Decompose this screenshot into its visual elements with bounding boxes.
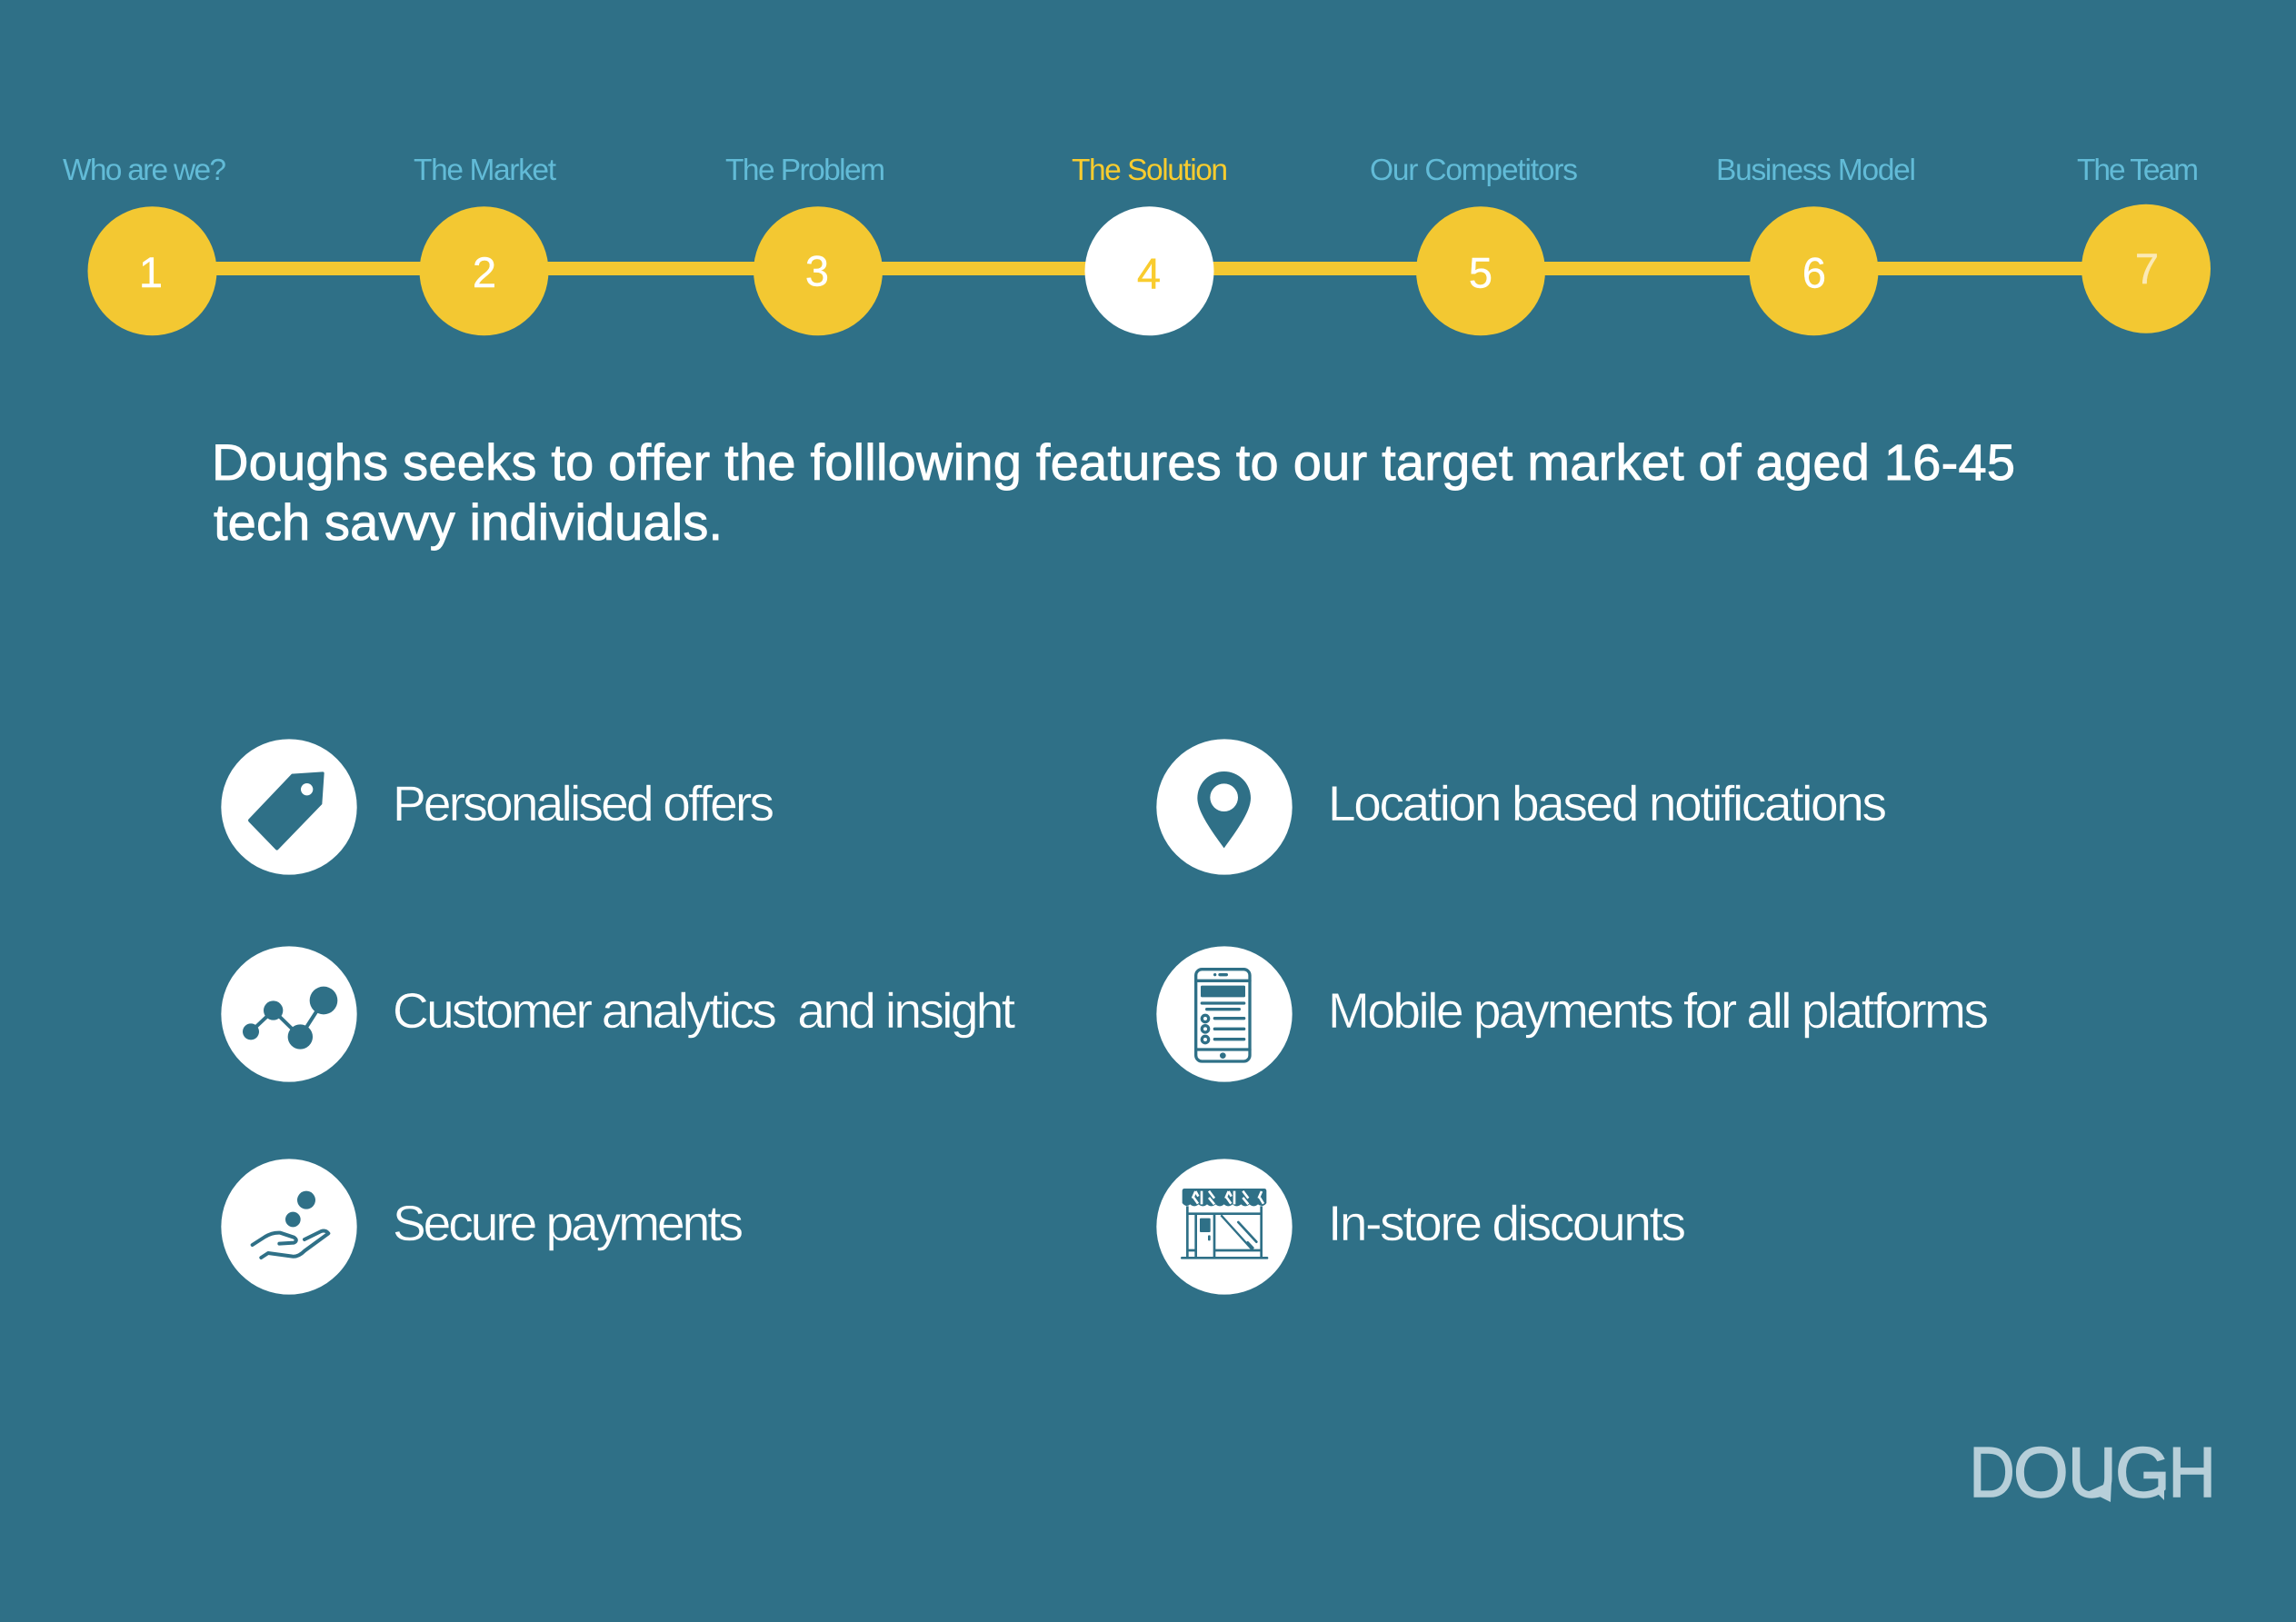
feature: Customer analytics and insight <box>221 946 1015 1082</box>
step 5: Our Competitors <box>1370 154 1578 335</box>
icon: mobile phone <box>1156 946 1293 1082</box>
step 3: The Problem <box>725 154 885 335</box>
step 7: The Team: 7 <box>2135 244 2159 293</box>
icon: map pin <box>1156 739 1293 875</box>
icon: hand with coins <box>221 1159 357 1295</box>
feature: Personalised offers <box>221 739 774 875</box>
logo: DOUGH <box>1969 1432 2216 1512</box>
step 6: Business Model: 6 <box>1802 249 1826 296</box>
step 2: The Market: 2 <box>473 248 496 296</box>
intro heading: tech savvy individuals. <box>214 493 723 551</box>
step 7: The Team: The Team <box>2077 154 2199 187</box>
logo: DOUGH: H <box>2169 1433 2216 1512</box>
logo: DOUGH: G <box>2115 1432 2171 1512</box>
step 4: The Solution (current): The Solution <box>1072 154 1228 187</box>
icon: price tag <box>221 739 357 875</box>
feature: Secure payments: Secure payments <box>393 1195 744 1251</box>
feature: Secure payments <box>221 1159 744 1295</box>
feature: Personalised offers: Personalised offers <box>393 775 774 831</box>
step 1: Who are we?: 1 <box>139 248 163 296</box>
step 6: Business Model: Business Model <box>1716 154 1916 187</box>
step 2: The Market: The Market <box>414 154 557 187</box>
feature: Mobile payments for all platforms <box>1156 946 1989 1082</box>
logo: DOUGH: O <box>2013 1432 2069 1512</box>
step 4: The Solution (current) <box>1072 154 1228 335</box>
intro heading <box>212 433 2015 551</box>
step 7: The Team <box>2077 154 2211 333</box>
intro heading: Doughs seeks to offer the folllowing features to our target market of aged 16-45 <box>212 433 2015 491</box>
step 3: The Problem: 3 <box>805 247 829 294</box>
step 5: Our Competitors: Our Competitors <box>1370 154 1578 187</box>
step 3: The Problem: The Problem <box>725 154 885 187</box>
logo: DOUGH: D <box>1969 1432 2015 1512</box>
icon: shop front <box>1156 1159 1293 1295</box>
step 1: Who are we? <box>63 154 226 335</box>
connector line <box>152 262 2146 275</box>
step 2: The Market <box>414 154 557 335</box>
feature: Customer analytics and insight: Customer analytics and insight <box>393 982 1015 1039</box>
feature: Mobile payments for all platforms: Mobile payments for all platforms <box>1328 982 1989 1039</box>
feature: Location based notifications <box>1156 739 1887 875</box>
feature: In-store discounts: In-store discounts <box>1328 1195 1686 1251</box>
step 1: Who are we?: Who are we? <box>63 154 226 187</box>
icon: analytics line graph <box>221 946 357 1082</box>
step 4: The Solution (current): 4 <box>1137 249 1161 298</box>
progress stepper <box>63 154 2211 335</box>
feature: Location based notifications: Location based notifications <box>1328 775 1887 831</box>
feature: In-store discounts <box>1156 1159 1686 1295</box>
step 6: Business Model <box>1716 154 1916 335</box>
step 5: Our Competitors: 5 <box>1469 249 1492 296</box>
logo: DOUGH: U <box>2068 1433 2117 1512</box>
